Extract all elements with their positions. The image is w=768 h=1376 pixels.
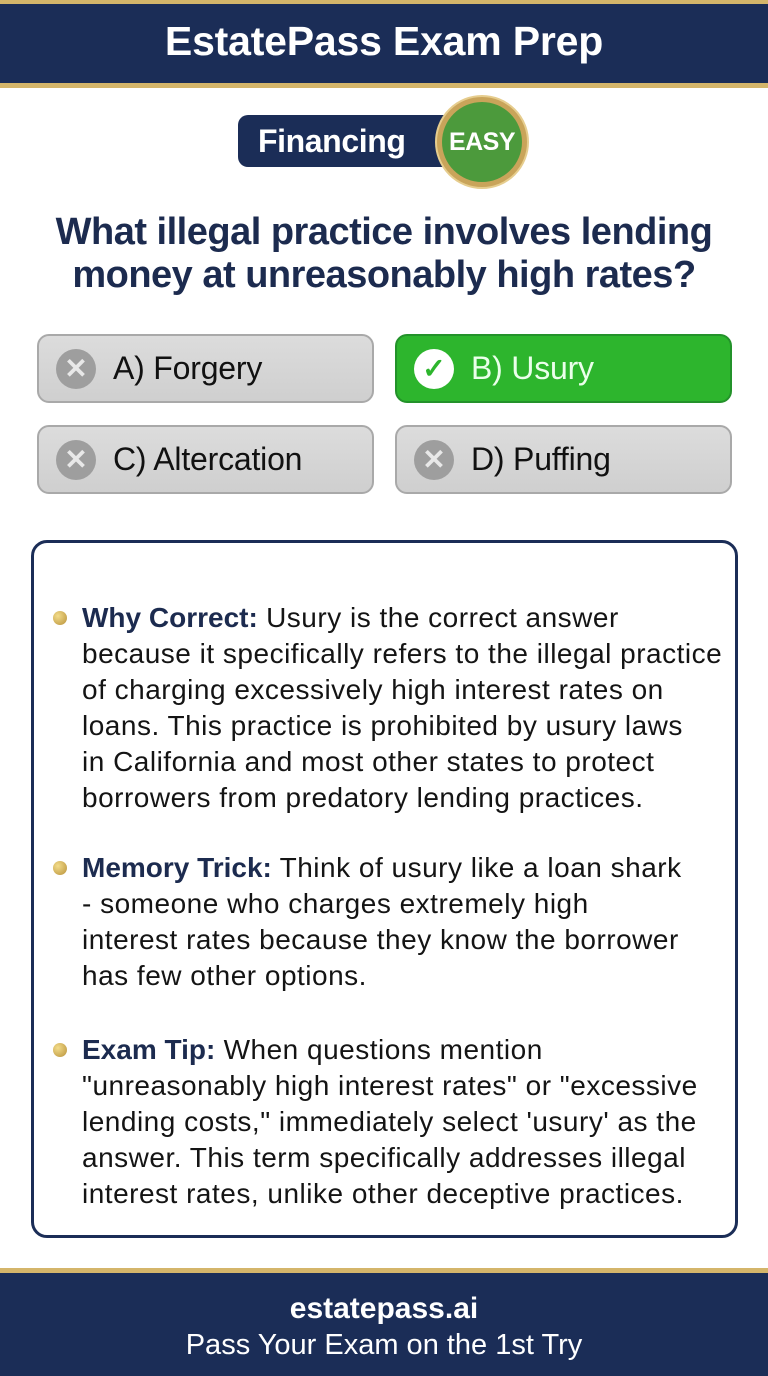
section: memory trick: [53, 852, 682, 991]
section: memory trick: interest rates because they know the borrower: [82, 924, 679, 955]
section: exam tip: Exam Tip: When questions mention: [82, 1034, 543, 1065]
section: exam tip: lending costs," immediately select 'usury' as the: [82, 1106, 697, 1137]
difficulty badge: EASY: [449, 128, 515, 156]
section: why correct: [53, 602, 722, 813]
category pill: [238, 115, 458, 167]
option B (correct): B) Usury: [471, 350, 594, 386]
section: memory trick: - someone who charges extremely high: [82, 888, 589, 919]
section: why correct: of charging excessively high interest rates on: [82, 674, 664, 705]
option A: [37, 334, 374, 403]
option C: [37, 425, 374, 494]
section: why correct: because it specifically refers to the illegal practice: [82, 638, 722, 669]
option A: ✕: [64, 353, 88, 384]
option D: ✕: [422, 444, 446, 475]
section: exam tip: interest rates, unlike other deceptive practices.: [82, 1178, 684, 1209]
option D: [395, 425, 732, 494]
section: exam tip: "unreasonably high interest rates" or "excessive: [82, 1070, 698, 1101]
section: why correct: in California and most other states to protect: [82, 746, 654, 777]
difficulty badge: [435, 95, 529, 189]
header bar: [0, 0, 768, 88]
option B (correct): [395, 334, 732, 403]
footer site: estatepass.ai: [290, 1292, 478, 1325]
question: What illegal practice involves lending: [56, 211, 712, 253]
option B (correct): ✓: [422, 353, 446, 384]
title: EstatePass Exam Prep: [165, 18, 603, 64]
section: exam tip: [53, 1034, 698, 1209]
category label: Financing: [258, 123, 406, 159]
question: money at unreasonably high rates?: [72, 254, 696, 296]
option D: D) Puffing: [471, 441, 611, 477]
section: memory trick: has few other options.: [82, 960, 367, 991]
footer: [0, 1268, 768, 1376]
question: [56, 211, 712, 296]
section: why correct: Why Correct: Usury is the correct answer: [82, 602, 619, 633]
footer tagline: Pass Your Exam on the 1st Try: [186, 1329, 582, 1361]
option C: C) Altercation: [113, 441, 302, 477]
section: why correct: loans. This practice is prohibited by usury laws: [82, 710, 683, 741]
option C: ✕: [64, 444, 88, 475]
explanation panel: [31, 540, 738, 1238]
option A: A) Forgery: [113, 350, 262, 386]
section: memory trick: Memory Trick: Think of usury like a loan shark: [82, 852, 682, 883]
section: exam tip: answer. This term specifically addresses illegal: [82, 1142, 686, 1173]
section: why correct: borrowers from predatory lending practices.: [82, 782, 644, 813]
